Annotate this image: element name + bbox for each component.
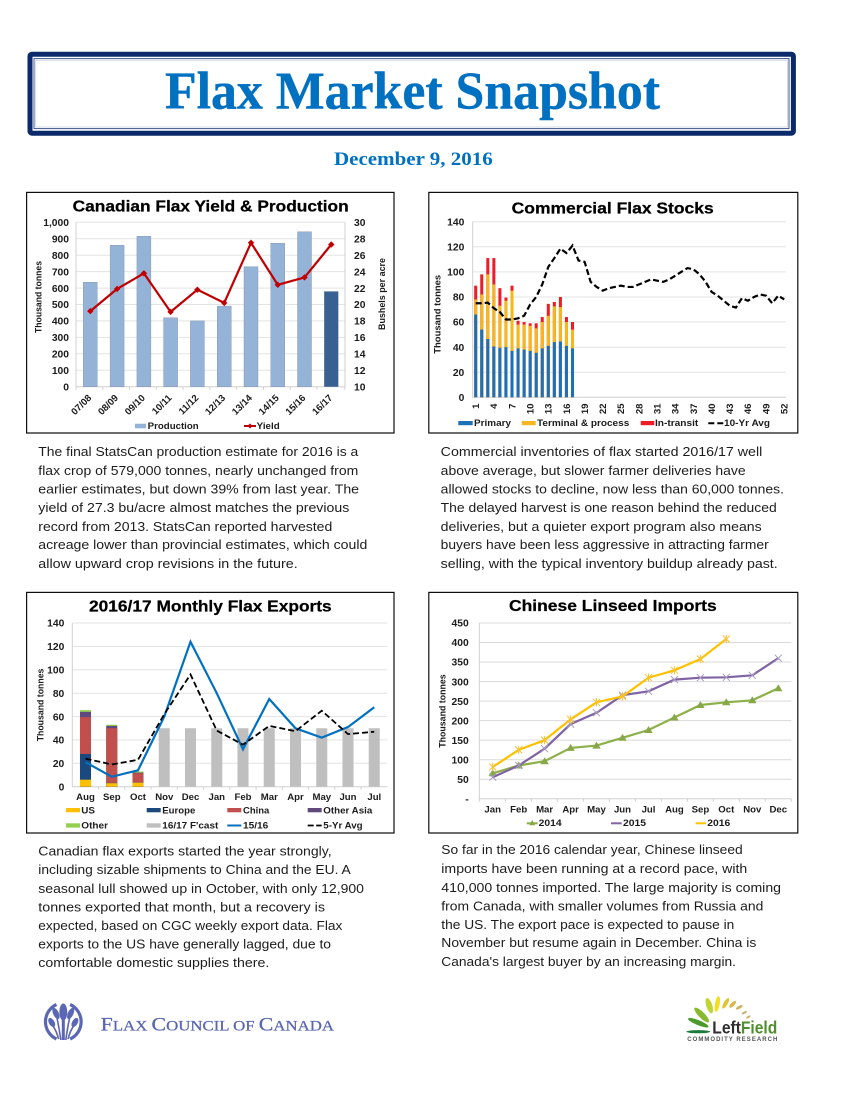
text block: imports commentary: November but resume again in December. China is — [441, 935, 757, 950]
legend — [135, 421, 280, 431]
legend: Terminal & process — [537, 418, 629, 428]
right axis labels: 18 — [354, 317, 366, 328]
week labels: 4 — [489, 403, 500, 409]
month labels: Oct — [718, 804, 735, 815]
text block: stocks commentary: selling, with the typical inventory buildup already past. — [441, 556, 778, 571]
y axis labels: 0 — [59, 782, 65, 793]
text block: exports commentary: seasonal lull showed up in October, with only 12,900 — [38, 881, 364, 896]
month labels: Aug — [665, 804, 684, 815]
right axis labels: 14 — [354, 350, 366, 360]
text block: stocks commentary: above average, but slower farmer deliveries have — [441, 463, 746, 478]
text block: imports commentary: Canada's largest buyer by an increasing margin. — [441, 954, 736, 969]
week labels: 40 — [707, 404, 718, 414]
text block: stocks commentary: The delayed harvest is one reason behind the reduced — [441, 500, 777, 515]
week labels: 10 — [526, 404, 536, 414]
left axis labels: 0 — [63, 382, 69, 393]
season labels: 16/17 — [310, 393, 335, 418]
panel: monthly flax exports chart — [27, 592, 394, 833]
month labels: Oct — [130, 792, 147, 803]
y axis labels — [452, 619, 469, 805]
month labels: Jul — [367, 792, 381, 803]
y axis labels — [447, 217, 465, 404]
season labels: 08/09 — [96, 393, 121, 418]
2016 line — [493, 639, 726, 767]
left axis labels: 1,000 — [43, 218, 69, 229]
legend: Other Asia — [323, 805, 373, 815]
week labels: 34 — [671, 403, 682, 414]
month labels: May — [587, 804, 606, 815]
y axis labels: - — [465, 794, 469, 805]
chart title: Commercial Flax Stocks — [512, 200, 714, 217]
month labels: Mar — [261, 792, 278, 803]
season labels: 12/13 — [203, 393, 228, 418]
text block: stocks commentary: Commercial inventories of flax started 2016/17 well — [441, 444, 762, 459]
month labels: Nov — [743, 804, 762, 815]
month labels: Jan — [209, 792, 225, 803]
text block: production commentary: acreage lower than provincial estimates, which could — [38, 537, 367, 552]
y axis labels: 120 — [447, 242, 465, 254]
legend — [66, 805, 373, 830]
season labels: 13/14 — [230, 392, 255, 418]
week labels: 31 — [652, 403, 664, 414]
week labels: 46 — [743, 404, 754, 414]
text block: production commentary: flax crop of 579,000 tonnes, nearly unchanged from — [38, 463, 358, 478]
month labels: Dec — [769, 804, 788, 815]
month labels: Jun — [339, 792, 357, 803]
month labels — [76, 792, 381, 803]
week labels: 19 — [580, 404, 591, 414]
legend: 10-Yr Avg — [724, 418, 770, 428]
season labels: 09/10 — [123, 393, 148, 418]
left axis title: Thousand tonnes — [34, 261, 44, 333]
right axis labels: 20 — [354, 300, 366, 311]
legend: 2014 — [539, 818, 563, 828]
legend: 16/17 F'cast — [162, 820, 218, 830]
right axis labels: 10 — [354, 382, 366, 393]
y axis labels: 100 — [47, 666, 65, 676]
text block: exports commentary: including sizable shipments to China and the EU. A — [38, 862, 351, 877]
legend: 2016 — [707, 818, 730, 828]
left axis labels: 600 — [52, 284, 69, 295]
icon: flax flower — [45, 1004, 81, 1040]
title text: Flax Market Snapshot — [165, 62, 660, 120]
right axis labels: 24 — [354, 267, 366, 278]
wordmark: LeftField — [712, 1017, 777, 1037]
week labels: 37 — [689, 404, 700, 414]
text block: imports commentary: the US. The export pace is expected to pause in — [441, 917, 734, 932]
y axis labels: 300 — [452, 677, 469, 688]
text block: production commentary: record from 2013. StatsCan reported harvested — [38, 519, 332, 534]
season labels: 11/12 — [177, 393, 201, 417]
logo: Flax Council of Canada — [45, 1004, 335, 1040]
month labels: Aug — [76, 792, 95, 803]
icon: sunburst leaves — [686, 996, 751, 1033]
text block: stocks commentary: allowed stocks to decline, now less than 60,000 tonnes. — [441, 482, 784, 497]
week labels: 1 — [471, 403, 482, 409]
legend: 5-Yr Avg — [323, 820, 363, 830]
panel: commercial flax stocks chart — [429, 192, 798, 433]
right axis labels: 12 — [354, 366, 366, 377]
y axis labels: 50 — [457, 775, 469, 786]
left axis labels: 300 — [52, 333, 69, 344]
y axis labels: 400 — [452, 638, 469, 649]
y axis labels: 140 — [47, 619, 65, 630]
chart title: Chinese Linseed Imports — [509, 598, 717, 615]
week labels: 7 — [507, 404, 518, 409]
week labels: 13 — [544, 404, 555, 414]
y axis labels: 100 — [452, 755, 469, 766]
right axis labels: 22 — [354, 284, 366, 295]
month labels: Jul — [642, 804, 655, 815]
10-year average line — [476, 246, 784, 320]
season labels: 07/08 — [69, 392, 95, 418]
text block: stocks commentary: buyers have been less aggressive in attracting farmer — [441, 537, 769, 552]
legend: Other — [81, 820, 108, 830]
legend: China — [243, 805, 270, 815]
text block: exports commentary: comfortable domestic supplies there. — [38, 955, 269, 970]
chart title: 2016/17 Monthly Flax Exports — [89, 599, 332, 616]
export bars and lines — [80, 642, 380, 787]
y axis labels: 450 — [452, 619, 469, 630]
month labels: Feb — [234, 792, 252, 803]
text block: exports commentary — [38, 843, 364, 970]
panel: Canadian flax yield and production chart — [27, 192, 394, 433]
tagline: COMMODITY RESEARCH — [687, 1037, 777, 1043]
text block: imports commentary: 410,000 tonnes imported. The large majority is coming — [441, 880, 781, 895]
text block: exports commentary: exports to the US have generally lagged, due to — [38, 936, 331, 951]
y axis labels: 20 — [453, 368, 465, 379]
week labels: 52 — [780, 404, 790, 414]
right axis title: Bushels per acre — [377, 258, 387, 330]
y axis labels: 80 — [453, 293, 465, 304]
right axis labels: 26 — [354, 251, 366, 262]
text block: exports commentary: expected, based on CGC weekly export data. Flax — [38, 918, 343, 933]
y axis labels: 60 — [53, 712, 65, 723]
y axis labels: 350 — [452, 658, 469, 669]
text block: imports commentary — [441, 842, 781, 969]
right axis labels: 30 — [354, 218, 366, 229]
text block: production commentary: yield of 27.3 bu/acre almost matches the previous — [38, 500, 350, 515]
left axis labels: 200 — [52, 350, 69, 360]
month labels: Apr — [287, 792, 304, 803]
2015 line — [493, 658, 778, 777]
title banner — [30, 54, 793, 133]
legend: Yield — [257, 421, 280, 431]
month labels: Jun — [614, 804, 631, 815]
week labels: 49 — [761, 404, 772, 414]
text block: production commentary: The final StatsCan production estimate for 2016 is a — [38, 444, 359, 459]
season labels: 15/16 — [284, 393, 308, 418]
y axis labels: 140 — [447, 217, 465, 228]
15/16 line — [86, 642, 374, 777]
left axis labels — [43, 218, 69, 393]
month labels: Sep — [103, 792, 121, 803]
text block: imports commentary: So far in the 2016 calendar year, Chinese linseed — [441, 842, 743, 857]
y axis labels: 250 — [452, 697, 469, 708]
y axis labels — [47, 619, 65, 793]
production bars — [83, 232, 338, 387]
y axis labels: 40 — [53, 736, 65, 747]
legend: Production — [148, 421, 199, 431]
text block: production commentary: allow upward crop revisions in the future. — [38, 556, 298, 571]
text block: exports commentary: Canadian flax exports started the year strongly, — [38, 843, 332, 858]
y axis labels: 120 — [47, 642, 65, 653]
y axis labels: 40 — [453, 343, 465, 354]
season labels: 14/15 — [257, 392, 282, 418]
y axis title: Thousand tonnes — [438, 674, 448, 748]
right axis labels: 16 — [354, 333, 366, 344]
week labels: 22 — [598, 404, 609, 414]
yield line — [90, 243, 331, 312]
2014 line — [493, 688, 778, 773]
month labels — [484, 804, 788, 815]
text block: production commentary: earlier estimates, but down 39% from last year. The — [38, 482, 359, 497]
text block: stocks commentary — [441, 444, 784, 571]
text block: imports commentary: from Canada, with smaller volumes from Russia and — [441, 898, 763, 913]
left axis labels: 500 — [52, 300, 69, 311]
week labels: 16 — [562, 404, 573, 414]
text block: stocks commentary: deliveries, but a quieter export program also means — [441, 519, 762, 534]
season labels — [69, 392, 335, 418]
5-year average line — [86, 674, 374, 764]
month labels: Nov — [155, 792, 174, 803]
y axis labels: 60 — [453, 318, 465, 329]
stacked stock bars — [474, 246, 784, 397]
week labels: 43 — [725, 404, 736, 414]
left axis labels: 100 — [52, 366, 69, 377]
legend: Europe — [162, 805, 195, 815]
y axis labels: 100 — [447, 268, 465, 279]
week labels — [471, 403, 790, 414]
left axis labels: 700 — [52, 267, 69, 278]
month labels: May — [312, 792, 332, 803]
y axis title: Thousand tonnes — [433, 275, 443, 354]
panel: Chinese linseed imports chart — [429, 592, 798, 833]
month labels: Jan — [484, 804, 501, 815]
left axis labels: 800 — [52, 251, 69, 262]
y axis labels: 20 — [53, 759, 65, 770]
legend: In-transit — [655, 418, 698, 428]
text block: imports commentary: imports have been running at a record pace, with — [441, 861, 747, 876]
season labels: 10/11 — [150, 392, 175, 417]
month labels: Feb — [510, 804, 527, 815]
legend: US — [81, 805, 95, 815]
week labels: 25 — [616, 403, 627, 414]
month labels: Mar — [536, 804, 553, 815]
right axis labels: 28 — [354, 234, 366, 245]
legend — [527, 818, 730, 828]
y axis labels: 150 — [452, 736, 469, 747]
chart title: Canadian Flax Yield & Production — [73, 199, 349, 216]
y axis labels: 0 — [459, 393, 465, 404]
legend: 2015 — [623, 818, 646, 828]
month labels: Dec — [182, 792, 200, 803]
text block: exports commentary: tonnes exported that month, but a recovery is — [38, 899, 326, 914]
right axis labels — [354, 218, 366, 393]
left axis labels: 400 — [52, 317, 69, 328]
organisation name: FLAX COUNCIL OF CANADA — [101, 1015, 335, 1036]
date: December 9, 2016 — [334, 150, 493, 170]
left axis labels: 900 — [52, 234, 69, 245]
y axis labels: 200 — [452, 716, 469, 727]
text block: production commentary — [38, 444, 367, 571]
week labels: 28 — [634, 403, 645, 414]
legend: 15/16 — [243, 820, 268, 830]
month labels: Sep — [692, 804, 709, 815]
legend: Primary — [474, 418, 512, 428]
logo: LeftField Commodity Research — [686, 996, 777, 1043]
y axis title: Thousand tonnes — [35, 669, 45, 741]
legend — [458, 418, 770, 428]
month labels: Apr — [562, 804, 579, 815]
y axis labels: 80 — [53, 689, 65, 700]
